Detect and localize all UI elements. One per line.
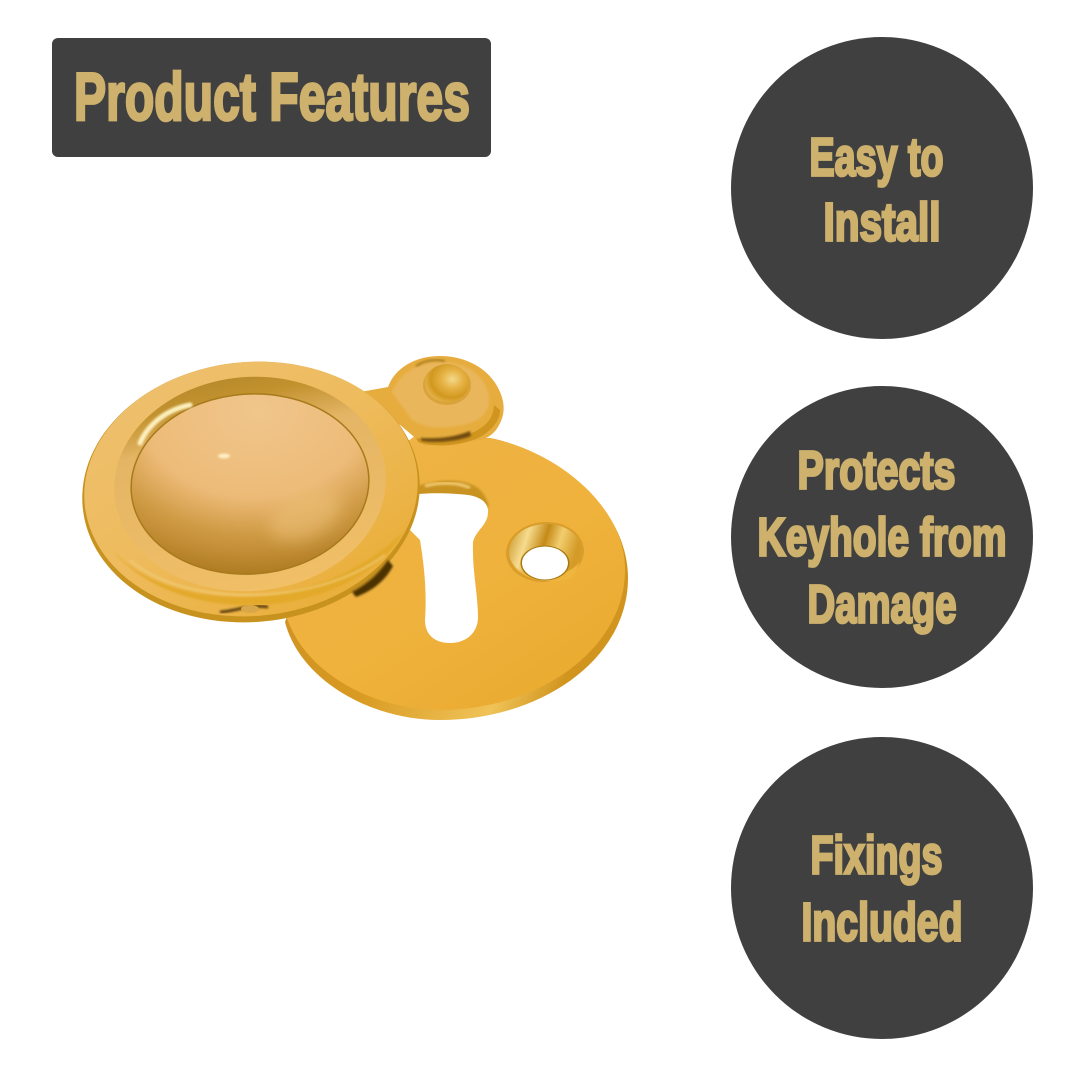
title: Product Features (52, 38, 491, 157)
feature badge: Protects Keyhole from Damage: Protects (798, 440, 956, 500)
product photo: brass keyhole escutcheon with swinging cover (71, 348, 628, 720)
feature badge: Easy to Install: Easy to (810, 128, 944, 188)
feature badge: Fixings Included: Included (802, 892, 962, 952)
feature badge: Fixings Included: Fixings (810, 826, 942, 886)
feature badge: Easy to Install: Install (824, 192, 940, 252)
pivot arm and rivet (360, 356, 504, 446)
round cover with dome (71, 348, 431, 636)
feature badge: Protects Keyhole from Damage (731, 386, 1033, 688)
feature badge: Protects Keyhole from Damage: Damage (808, 574, 956, 634)
feature badge: Fixings Included (731, 737, 1033, 1039)
feature badge: Easy to Install (731, 37, 1033, 339)
back plate with keyhole and screw hole (285, 436, 628, 720)
title: Product Features: Product Features (74, 59, 470, 135)
